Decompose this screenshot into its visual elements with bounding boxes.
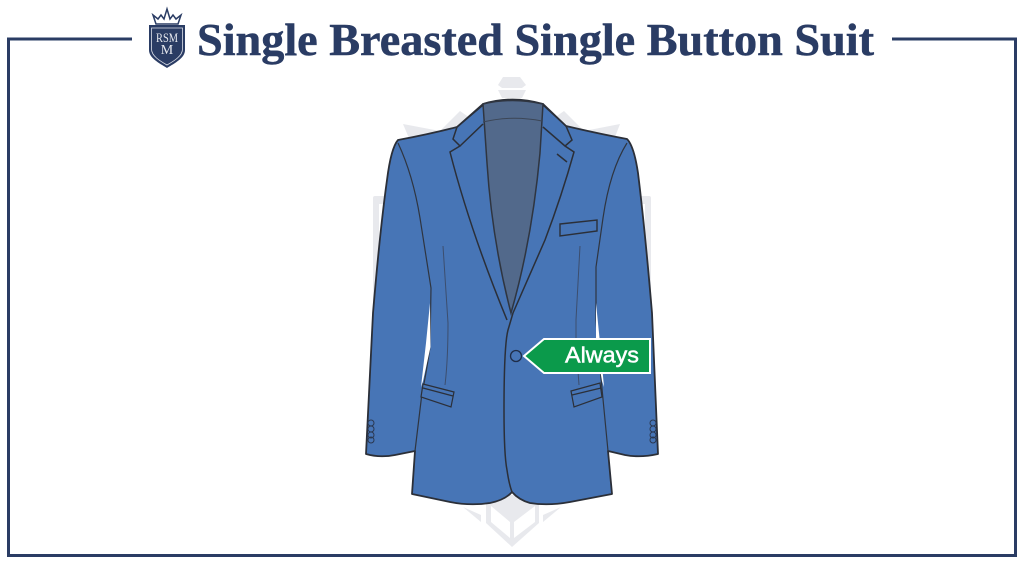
hip pockets xyxy=(421,383,602,407)
sleeve buttons xyxy=(368,420,656,443)
icon: logo crest: RSM xyxy=(156,30,178,45)
shirt panel xyxy=(483,100,543,313)
body gaps xyxy=(421,303,430,387)
jacket xyxy=(366,100,658,504)
front button xyxy=(510,350,522,362)
callout: Always xyxy=(524,339,650,373)
title: Single Breasted Single Button Suit xyxy=(197,15,874,65)
icon: logo crest: M xyxy=(161,43,174,58)
left and right lapels xyxy=(450,105,574,492)
icon: logo crest xyxy=(149,9,185,68)
callout: Always: Always xyxy=(565,342,639,368)
jacket body and sleeves xyxy=(366,100,658,504)
sleeve seams xyxy=(398,143,627,451)
chest pocket xyxy=(560,220,597,236)
watermark crest behind jacket xyxy=(373,77,651,547)
collar seam xyxy=(483,118,542,122)
darts xyxy=(443,246,580,385)
watermark inner cut-outs xyxy=(491,506,535,538)
